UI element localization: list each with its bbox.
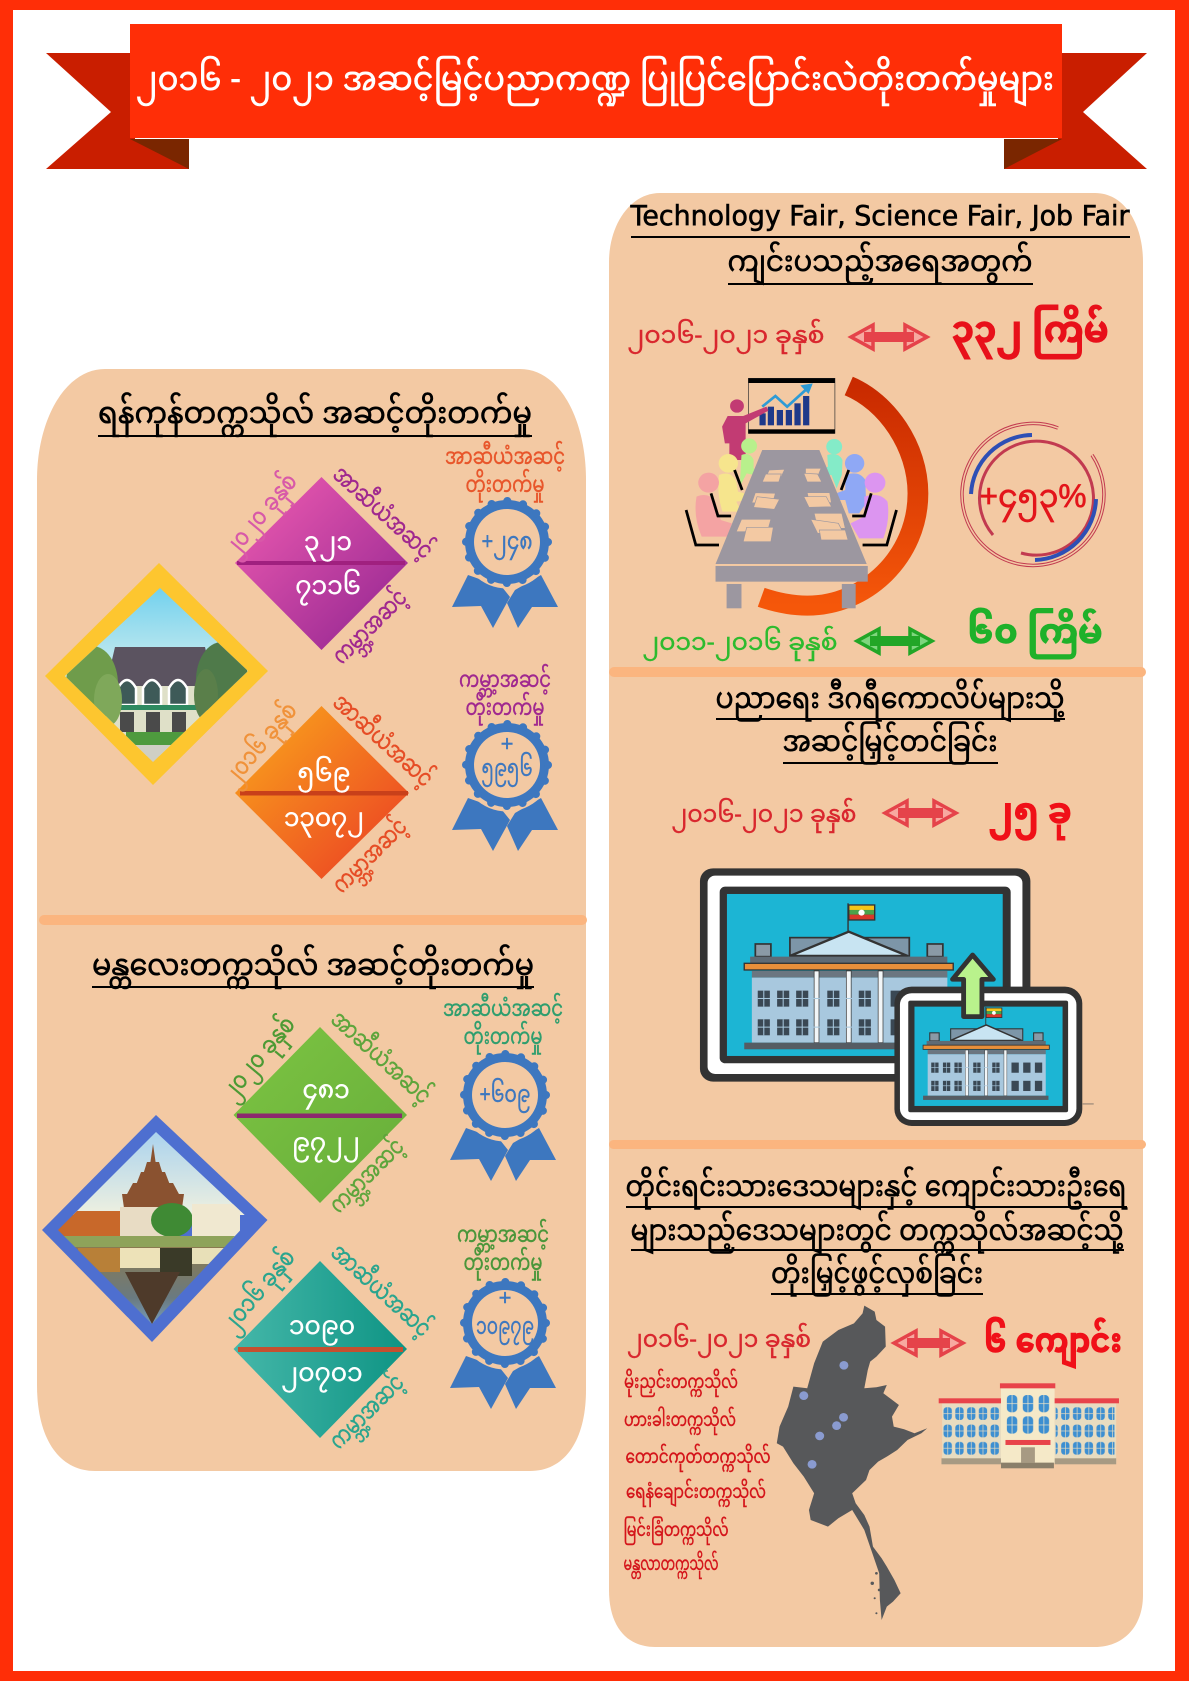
list: upgraded universities: မိုးညှင်းတက္ကသိုလ် xyxy=(624,1367,738,1398)
table xyxy=(716,450,868,608)
medal: Yangon ASEAN improvement: +၂၄၈ xyxy=(482,528,532,560)
attendees xyxy=(686,438,896,545)
arrow: green double xyxy=(857,629,932,653)
medal: Yangon world improvement: တိုးတက်မှု xyxy=(466,691,544,726)
medal: Yangon ASEAN improvement: အာဆီယံအဆင့် xyxy=(445,440,565,472)
medal: Yangon world improvement: + xyxy=(501,731,513,756)
arrow: red double 3 xyxy=(894,1331,963,1355)
up arrow xyxy=(953,955,993,1017)
diamond: Yangon 2020 ranks: ၃၂၁ xyxy=(304,528,352,562)
diamond: Mandalay 2016 ranks: အာဆီယံအဆင့် xyxy=(324,1236,439,1344)
medal: Yangon ASEAN improvement: တိုးတက်မှု xyxy=(466,468,544,503)
stat row: 2011-2016 fairs xyxy=(642,607,1102,661)
list: upgraded universities: ရေနံချောင်းတက္ကသိုလ် xyxy=(626,1477,766,1508)
stat row: 2011-2016 fairs: ၂၀၁၁-၂၀၁၆ ခုနှစ် xyxy=(642,626,838,661)
medal: Yangon ASEAN improvement xyxy=(445,440,565,628)
heading: ethnic regions xyxy=(626,1167,1127,1297)
medal: Mandalay ASEAN improvement: အာဆီယံအဆင့် xyxy=(443,992,563,1024)
panel background left xyxy=(37,369,586,1471)
diamond: Yangon 2016 ranks: အာဆီယံအဆင့် xyxy=(326,686,441,794)
heading: ethnic regions: များသည့်ဒေသများတွင် တက္ကသိုလ်အဆင့်သို့ xyxy=(630,1211,1124,1254)
diamond: Mandalay 2016 ranks: ကမ္ဘာ့အဆင့် xyxy=(322,1367,413,1458)
medal: Mandalay world improvement: တိုးတက်မှု xyxy=(464,1246,542,1281)
stat row: 2016-2021 fairs: ၃၃၂ ကြိမ် xyxy=(952,303,1108,360)
arc xyxy=(761,386,918,606)
stat row: 2016-2021 fairs xyxy=(628,303,1108,360)
diamond: Mandalay 2020 ranks: အာဆီယံအဆင့် xyxy=(324,1003,439,1111)
diamond: Yangon 2020 ranks: အာဆီယံအဆင့် xyxy=(326,458,441,566)
diamond: Yangon 2016 ranks: ၂၀၁၆ ခုနှစ် xyxy=(215,695,307,794)
stat row: 25 colleges xyxy=(672,790,1072,840)
heading: Mandalay University: မန္တလေးတက္ကသိုလ် အဆင့်တိုးတက်မှု xyxy=(92,943,534,990)
illustration: conference table with arc xyxy=(686,378,918,608)
presenter xyxy=(722,399,768,460)
diamond: Mandalay 2020 ranks xyxy=(213,1003,439,1222)
medal: Yangon world improvement: ကမ္ဘာ့အဆင့် xyxy=(459,663,551,698)
stat row: 6 universities xyxy=(627,1316,1122,1369)
diamond: Yangon 2020 ranks: ၂၀၂၀ ခုနှစ် xyxy=(215,466,307,565)
heading: fairs xyxy=(630,199,1130,285)
medal: Mandalay world improvement: + xyxy=(499,1285,511,1310)
diamond: Mandalay 2016 ranks: ၁၀၉၀ xyxy=(289,1312,355,1346)
ring: +453%: +၄၅၃% xyxy=(980,478,1086,522)
medal: Yangon world improvement xyxy=(452,663,558,851)
medal: Yangon world improvement: ၅၉၅၆ xyxy=(482,752,532,787)
diamond: Mandalay 2020 ranks: ၉၇၂၂ xyxy=(292,1129,360,1163)
list: upgraded universities: မန္တလာတက္ကသိုလ် xyxy=(624,1549,718,1580)
diamond: Yangon 2016 ranks: ၅၆၉ xyxy=(298,755,350,793)
stat row: 6 universities: ၂၀၁၆-၂၀၂၁ ခုနှစ် xyxy=(627,1323,811,1358)
title: ၂၀၁၆ - ၂၀၂၁ အဆင့်မြင့်ပညာကဏ္ဍ ပြုပြင်ပြောင်းလဲတိုးတက်မှုများ xyxy=(136,54,1054,107)
diamond: Yangon 2020 ranks xyxy=(215,458,441,673)
ribbon banner xyxy=(130,24,1062,138)
heading: degree colleges: အဆင့်မြှင့်တင်ခြင်း xyxy=(782,722,998,765)
list: upgraded universities xyxy=(624,1367,770,1580)
icon: school building xyxy=(939,1383,1119,1468)
arrow: red double xyxy=(851,325,927,349)
divider right bottom xyxy=(609,1140,1146,1149)
heading: Yangon University: ရန်ကုန်တက္ကသိုလ် အဆင့်တိုးတက်မှု xyxy=(98,391,532,438)
diamond: Yangon 2016 ranks: ၁၃၀၇၂ xyxy=(284,804,364,838)
diamond: Yangon 2016 ranks xyxy=(215,686,441,902)
illustration: tablets with buildings xyxy=(700,868,1094,1126)
large tablet xyxy=(700,868,1030,1082)
small tablet xyxy=(894,987,1094,1126)
heading: degree colleges xyxy=(716,679,1065,765)
diamond: Mandalay 2020 ranks: ၂၀၂၀ ခုနှစ် xyxy=(213,1009,305,1108)
ribbon right tail xyxy=(1004,53,1147,169)
photo: Yangon University xyxy=(45,563,268,785)
screen chart xyxy=(748,378,835,434)
medal: Mandalay ASEAN improvement: တိုးတက်မှု xyxy=(464,1020,542,1055)
title ribbon xyxy=(46,24,1147,169)
ring: +453% xyxy=(962,423,1104,565)
list: upgraded universities: တောင်ကုတ်တက္ကသိုလ် xyxy=(626,1442,770,1473)
diamond: Mandalay 2016 ranks: ၂၀၇၀၁ xyxy=(281,1359,363,1393)
ribbon left tail xyxy=(46,53,189,169)
medal: Mandalay ASEAN improvement xyxy=(443,992,563,1181)
photo: Mandalay palace xyxy=(42,1115,268,1342)
stat row: 25 colleges: ၂၅ ခု xyxy=(988,790,1072,840)
panel: right column xyxy=(609,193,1146,1647)
stat row: 2016-2021 fairs: ၂၀၁၆-၂၀၂၁ ခုနှစ် xyxy=(628,319,824,354)
list: upgraded universities: မြင်းခြံတက္ကသိုလ် xyxy=(624,1515,728,1546)
stat row: 6 universities: ၆ ကျောင်း xyxy=(984,1316,1122,1369)
heading: ethnic regions: တိုင်းရင်းသားဒေသများနှင့် ကျောင်းသားဦးရေ xyxy=(626,1167,1127,1210)
heading: ethnic regions: တိုးမြှင့်ဖွင့်လှစ်ခြင်း xyxy=(771,1254,983,1297)
heading: degree colleges: ပညာရေး ဒီဂရီကောလိပ်များသို့ xyxy=(716,679,1064,722)
arrow: red double 2 xyxy=(885,801,956,825)
diamond: Mandalay 2016 ranks xyxy=(213,1236,439,1458)
stat row: 25 colleges: ၂၀၁၆-၂၀၂၁ ခုနှစ် xyxy=(672,798,856,833)
medal: Mandalay ASEAN improvement: +၆၀၉ xyxy=(480,1078,530,1113)
list: upgraded universities: ဟားခါးတက္ကသိုလ် xyxy=(624,1405,736,1436)
medal: Mandalay world improvement: ကမ္ဘာ့အဆင့် xyxy=(457,1218,549,1253)
diamond: Yangon 2016 ranks: ကမ္ဘာ့အဆင့် xyxy=(325,811,416,902)
divider right top xyxy=(609,667,1146,677)
diamond: Yangon 2020 ranks: ၇၁၁၆ xyxy=(295,568,361,606)
medal: Mandalay world improvement xyxy=(450,1218,556,1409)
panel background right xyxy=(609,193,1143,1647)
heading: fairs: ကျင်းပသည့်အရေအတွက် xyxy=(728,242,1032,285)
diamond: Mandalay 2020 ranks: ၄၈၁ xyxy=(302,1076,350,1110)
map: Myanmar xyxy=(777,1306,927,1620)
divider left xyxy=(39,915,587,925)
medal: Mandalay world improvement: ၁၀၉၇၉ xyxy=(476,1313,534,1345)
stat row: 2011-2016 fairs: ၆၀ ကြိမ် xyxy=(968,607,1102,659)
diamond: Yangon 2020 ranks: ကမ္ဘာ့အဆင့် xyxy=(325,582,416,673)
panel: university rankings xyxy=(37,369,587,1471)
heading: fairs: Technology Fair, Science Fair, Job Fair xyxy=(630,199,1130,232)
diamond: Mandalay 2020 ranks: ကမ္ဘာ့အဆင့် xyxy=(322,1131,413,1222)
diamond: Mandalay 2016 ranks: ၂၀၁၆ ခုနှစ် xyxy=(213,1242,305,1341)
